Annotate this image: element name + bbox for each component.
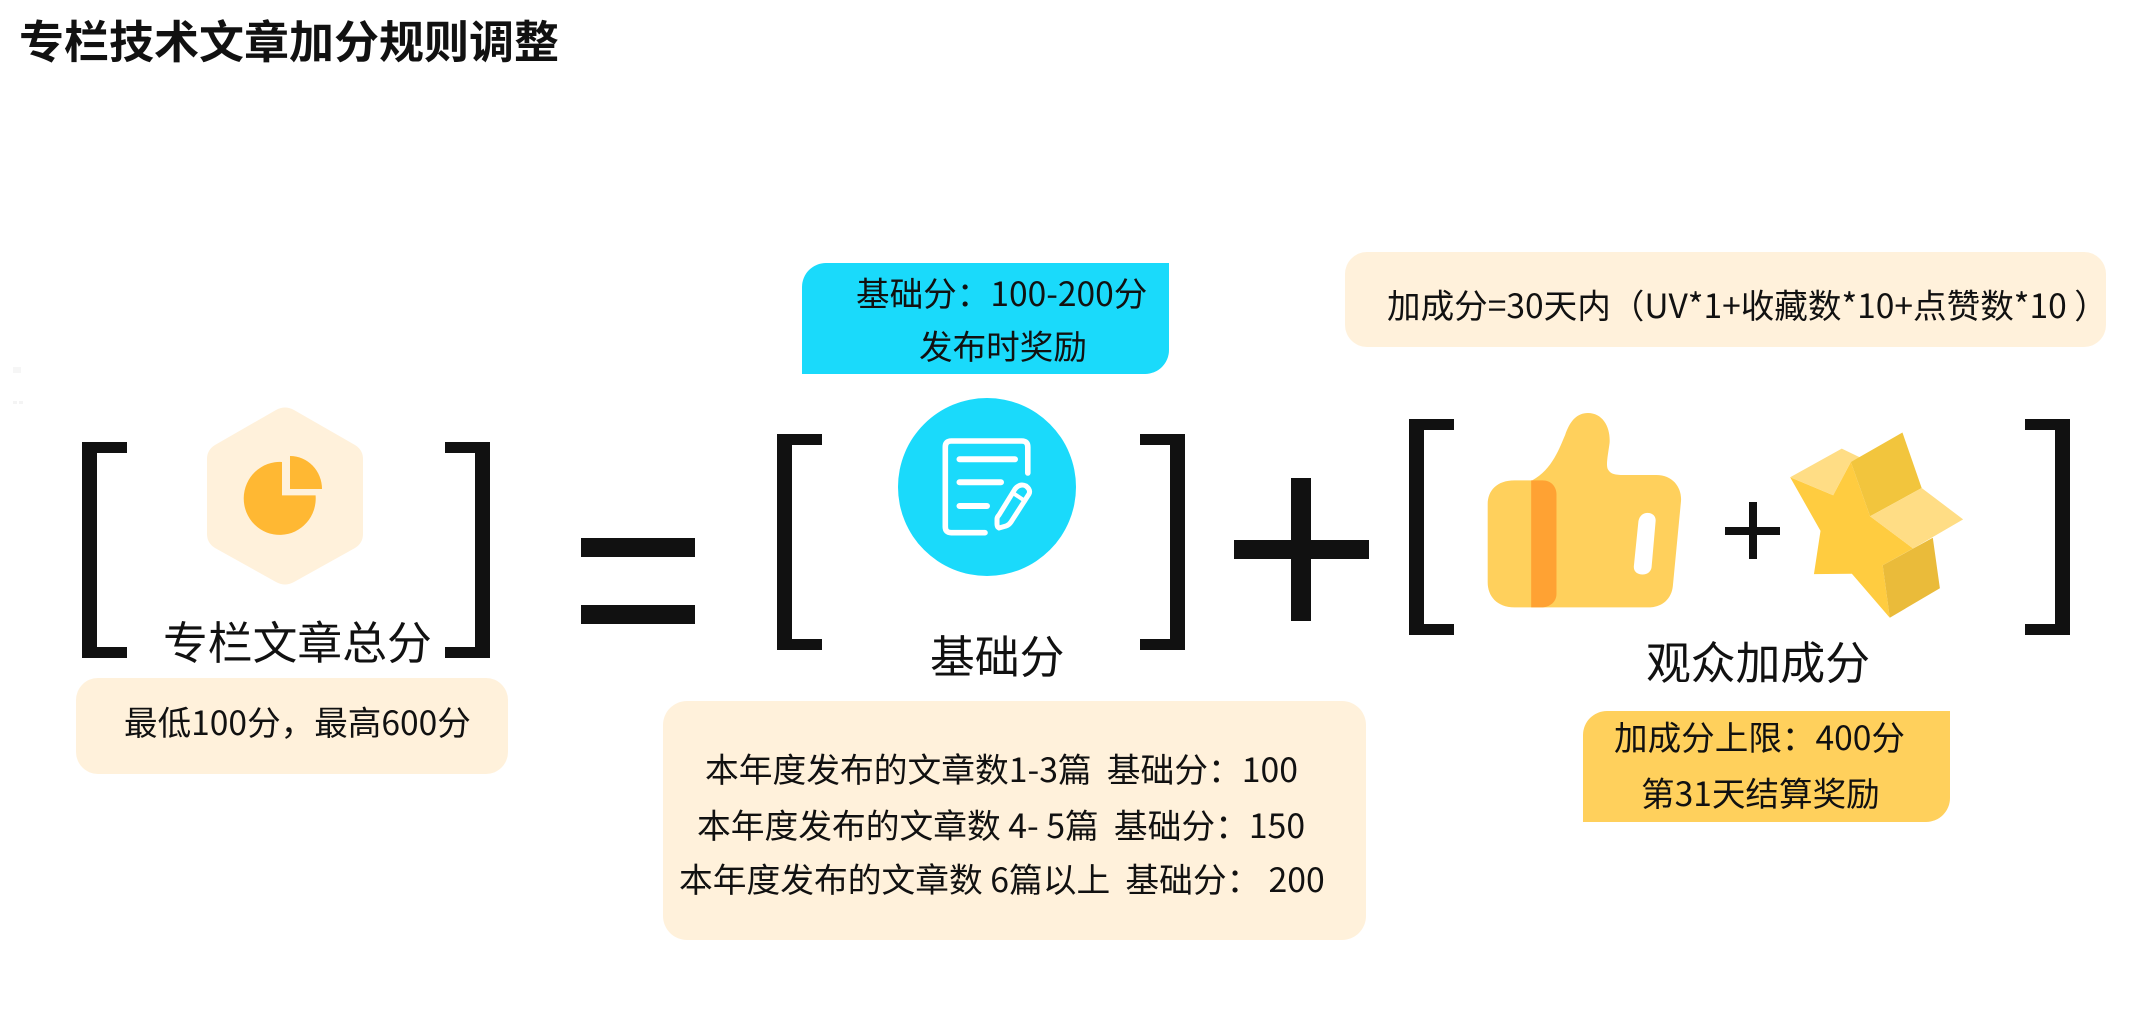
icon: document and pencil in circle: [898, 398, 1076, 576]
callout: bonus cap: [1583, 711, 1950, 822]
text: bonus cap value: 加成分上限：400分: [1614, 711, 1905, 760]
faint artefact marks: [13, 367, 23, 404]
callout: base score range: [802, 263, 1169, 374]
small plus sign: [1725, 502, 1780, 559]
label: base score: 基础分: [930, 621, 1064, 686]
text: bonus formula: 加成分=30天内（UV*1+收藏数*10+点赞数*10 ）: [1387, 279, 2108, 328]
text: base score value: 基础分：100-200分: [856, 267, 1147, 316]
icon: folded star: [1790, 432, 1963, 618]
right bracket: base score: [1140, 434, 1185, 650]
text: tier 3: 本年度发布的文章数 6篇以上 基础分： 200: [679, 853, 1325, 902]
left bracket: total score: [82, 442, 127, 658]
panel: base score tiers: [663, 701, 1366, 940]
icon: thumbs up: [1488, 413, 1682, 608]
left bracket: base score: [777, 434, 822, 650]
label: total score: 专栏文章总分: [163, 607, 432, 672]
icon: hexagon pie chart: [207, 408, 363, 584]
plus sign: [1234, 478, 1369, 621]
text: tier 1: 本年度发布的文章数1-3篇 基础分：100: [705, 743, 1298, 792]
equals sign: [581, 538, 695, 624]
text: settled on day 31: 第31天结算奖励: [1641, 767, 1880, 816]
right bracket: audience bonus: [2025, 419, 2070, 635]
panel: score range: [76, 678, 508, 774]
panel: bonus formula: [1345, 252, 2106, 347]
left bracket: audience bonus: [1409, 419, 1454, 635]
label: audience bonus: 观众加成分: [1646, 627, 1870, 692]
text: min and max score: 最低100分，最高600分: [124, 696, 471, 745]
title: 专栏技术文章加分规则调整: [19, 6, 559, 71]
text: awarded on publish: 发布时奖励: [919, 320, 1087, 369]
text: tier 2: 本年度发布的文章数 4- 5篇 基础分：150: [697, 799, 1305, 848]
right bracket: total score: [445, 442, 490, 658]
